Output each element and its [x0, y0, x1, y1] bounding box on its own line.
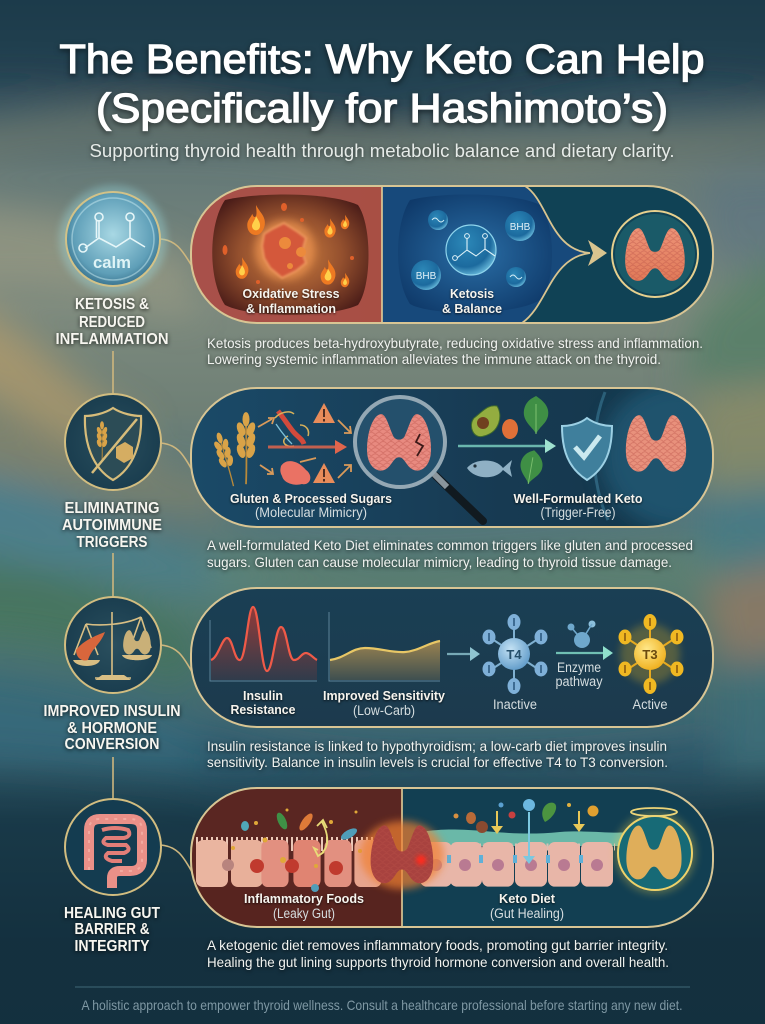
heading: improved insulin and hormone conversion: & HORMONE — [67, 720, 157, 737]
text block: gut description: A ketogenic diet removes inflammatory foods, promoting gut barrier integrity. — [207, 937, 668, 953]
T4 molecule: T4 — [506, 647, 522, 662]
arrow: red — [268, 440, 347, 454]
icon: ketosis calm molecule circle: calm — [93, 253, 131, 272]
panel labels: & Balance — [442, 301, 502, 316]
left half: leaky gut — [191, 788, 402, 927]
panel labels — [244, 891, 564, 921]
enzyme pathway: pathway — [556, 674, 603, 689]
red half: oxidative stress — [191, 186, 382, 323]
footer note: A holistic approach to empower thyroid wellness. Consult a healthcare professional before starting any new diet. — [82, 997, 682, 1013]
arrow: to T4 — [447, 647, 480, 661]
heading: ketosis and reduced inflammation: INFLAMMATION — [56, 331, 168, 348]
text block: triggers description — [207, 537, 693, 570]
subtitle: Supporting thyroid health through metabolic balance and dietary clarity. — [90, 140, 674, 161]
icon: keto foods — [467, 396, 548, 486]
blue half: ketosis and balance — [382, 186, 713, 323]
icon: magnifier with thyroid — [355, 397, 483, 521]
heading: healing gut barrier: INTEGRITY — [74, 938, 150, 955]
text block: ketosis description: Ketosis produces beta-hydroxybutyrate, reducing oxidative stress and inflammation. — [207, 335, 703, 351]
icon: wheat — [210, 412, 257, 488]
heading: improved insulin and hormone conversion: IMPROVED INSULIN — [44, 703, 180, 720]
panel labels: (Gut Healing) — [490, 906, 564, 921]
heading: improved insulin and hormone conversion: CONVERSION — [64, 736, 160, 753]
icon: intestine — [65, 799, 161, 895]
chart labels: (Low-Carb) — [353, 703, 415, 718]
chart labels: Improved Sensitivity — [323, 688, 446, 703]
panel: eliminating triggers — [190, 387, 714, 528]
T4 molecule: Inactive — [493, 697, 537, 712]
T3 molecule: Active — [632, 697, 668, 712]
panel labels: Ketosis — [450, 286, 494, 301]
title — [60, 36, 705, 131]
text block: triggers description: sugars. Gluten can cause molecular mimicry, leading to thyroid tissue damage. — [207, 554, 672, 570]
heading: eliminating autoimmune triggers: AUTOIMMUNE — [62, 517, 162, 534]
panel labels: Gluten & Processed Sugars — [230, 491, 392, 506]
text block: insulin description: Insulin resistance is linked to hypothyroidism; a low-carb diet improves insulin — [207, 738, 667, 754]
timeline connectors — [113, 239, 192, 872]
chart labels — [230, 688, 446, 718]
text block: ketosis description: Lowering systemic inflammation alleviates the immune attack on the thyroid. — [207, 351, 661, 367]
chart labels: Resistance — [230, 702, 296, 717]
panel labels: Inflammatory Foods — [244, 891, 364, 906]
text block: gut description: Healing the gut lining supports thyroid hormone conversion and overall health. — [207, 954, 669, 970]
arrow: teal — [458, 439, 556, 453]
title: (Specifically for Hashimoto’s) — [96, 85, 668, 131]
heading: improved insulin and hormone conversion — [44, 703, 180, 753]
heading: eliminating autoimmune triggers: TRIGGERS — [76, 534, 148, 551]
heading: ketosis and reduced inflammation: KETOSIS & — [75, 296, 149, 313]
heading: ketosis and reduced inflammation: REDUCED — [79, 314, 145, 331]
icon: shield with crossed wheat — [65, 394, 161, 490]
panel labels: (Trigger-Free) — [540, 505, 616, 520]
icon: shield with check — [562, 418, 612, 480]
panel labels — [230, 491, 642, 520]
text block: insulin description: sensitivity. Balance in insulin levels is crucial for effective T4 to T3 conversion. — [207, 754, 668, 770]
T3 molecule: T3 — [642, 647, 658, 662]
icon: bacteria and warnings — [258, 403, 351, 485]
icon: thyroid in ring — [612, 211, 698, 297]
icon: golden thyroid with halo — [614, 808, 696, 894]
panel labels: (Leaky Gut) — [273, 906, 335, 921]
panel: ketosis — [191, 186, 713, 323]
panel: gut healing — [191, 788, 713, 927]
heading: healing gut barrier: HEALING GUT — [64, 905, 160, 922]
chart labels: Insulin — [243, 688, 283, 703]
panel labels: Keto Diet — [499, 891, 556, 906]
icon: ketosis calm molecule circle — [59, 185, 167, 293]
panel: insulin and hormones — [191, 588, 713, 727]
text block: insulin description — [207, 738, 668, 770]
enzyme pathway — [556, 620, 613, 689]
panel labels — [242, 286, 502, 316]
arrow: to thyroid — [588, 240, 607, 266]
T3 molecule — [618, 614, 684, 712]
T4 molecule — [482, 614, 548, 712]
enzyme pathway: Enzyme — [557, 660, 601, 675]
chart: improved sensitivity — [329, 612, 440, 681]
heading: ketosis and reduced inflammation — [56, 296, 168, 348]
icon: inflamed thyroid — [360, 821, 444, 889]
panel labels: (Molecular Mimicry) — [255, 505, 367, 520]
text block: ketosis description — [207, 335, 703, 367]
blue half: ketosis and balance: BHB — [416, 271, 437, 282]
heading: healing gut barrier: BARRIER & — [74, 921, 150, 938]
title: The Benefits: Why Keto Can Help — [60, 36, 705, 82]
right half: gut healing — [402, 788, 713, 927]
heading: eliminating autoimmune triggers — [62, 500, 162, 551]
icon: healthy thyroid — [626, 415, 686, 472]
panel labels: Oxidative Stress — [242, 286, 340, 301]
heading: eliminating autoimmune triggers: ELIMINATING — [64, 500, 160, 517]
heading: healing gut barrier — [64, 905, 160, 955]
blue half: ketosis and balance: BHB — [510, 222, 531, 233]
text block: triggers description: A well-formulated Keto Diet eliminates common triggers like gluten and processed — [207, 537, 693, 553]
background: layered misty waves — [0, 0, 765, 790]
panel labels: Well-Formulated Keto — [514, 491, 642, 506]
text block: gut description — [207, 937, 669, 970]
panel labels: & Inflammation — [246, 301, 336, 316]
icon: balance scale — [65, 597, 161, 693]
chart: insulin resistance — [210, 607, 317, 681]
